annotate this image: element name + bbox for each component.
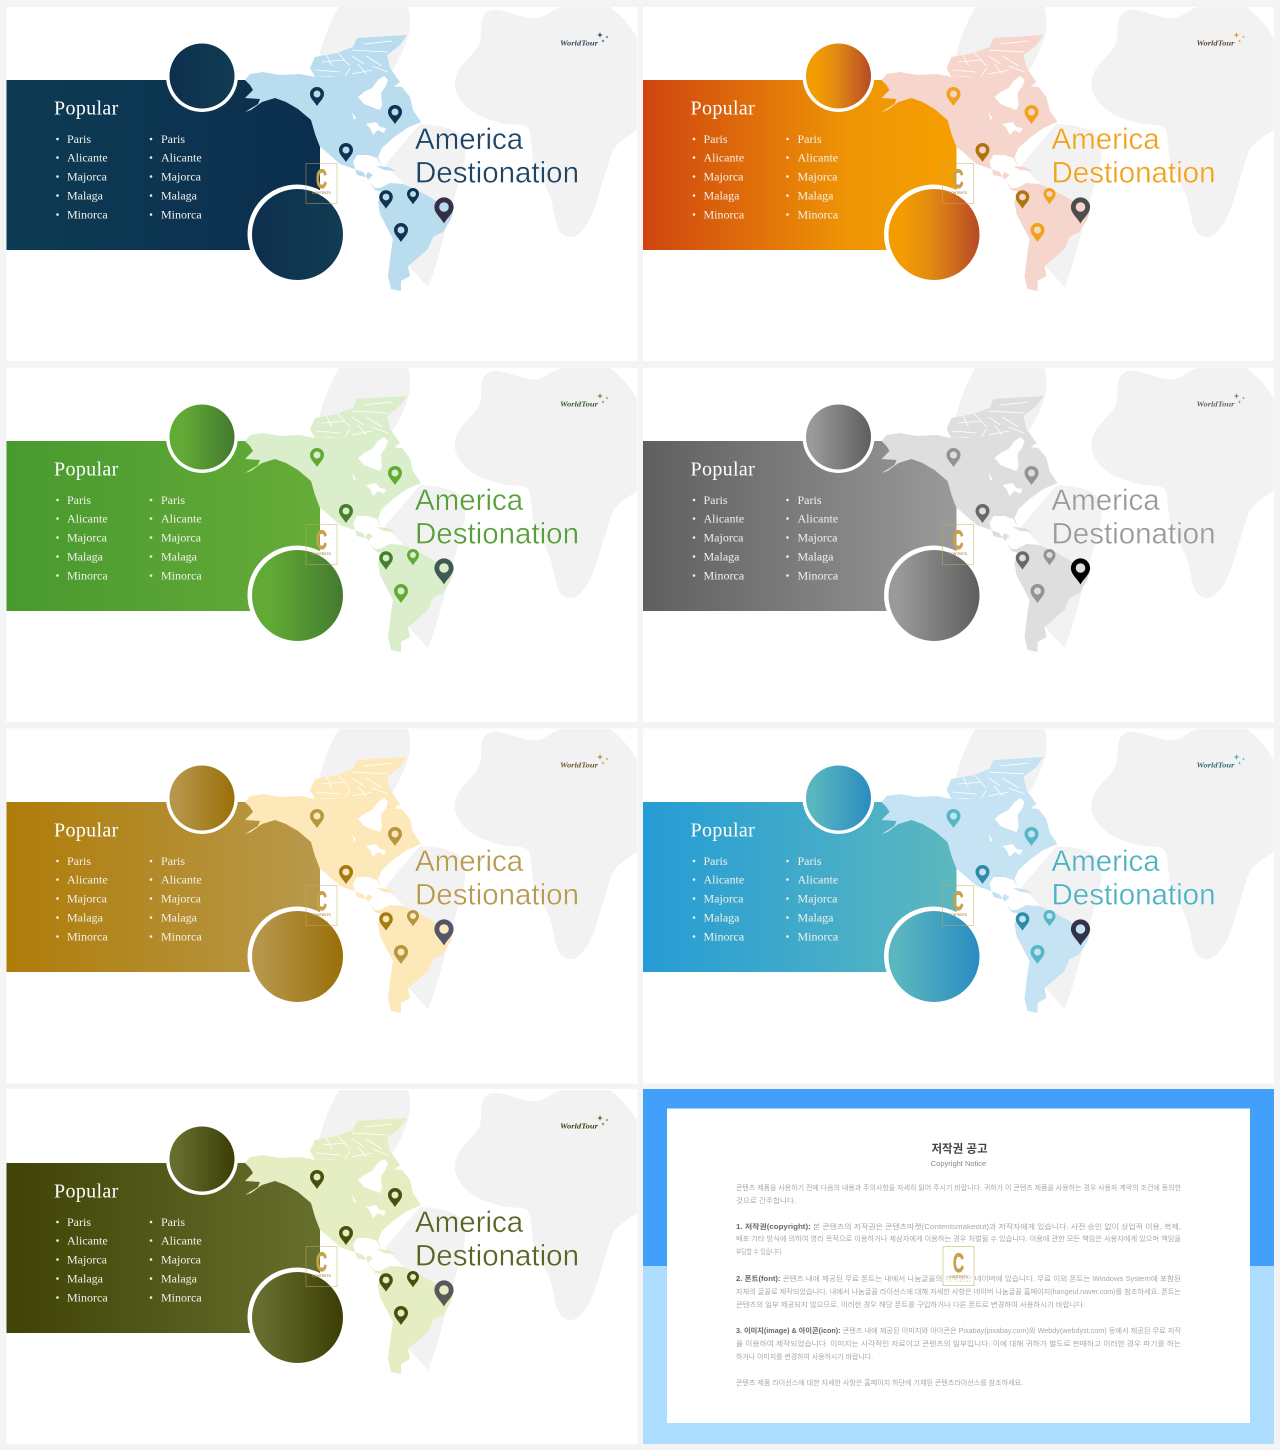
slide background (6, 1089, 638, 1444)
list column 1: Majorca (67, 170, 108, 184)
list column 2: Alicante (798, 872, 838, 886)
list column 1: Alicante (704, 512, 744, 526)
list column 1: Minorca (67, 208, 108, 222)
title: Destionation (415, 156, 579, 190)
bottom circle (248, 1268, 346, 1366)
title: America (1052, 845, 1160, 878)
logo (560, 393, 608, 408)
list column 2: Malaga (798, 910, 834, 924)
logo: WorldTour (560, 38, 598, 48)
section 3: image and icon: 3. 이미지(image) & 아이콘(icon): 콘텐츠 내에 제공된 이미지와 아이콘은 Pixabay(pixabay.com)와 Webdy(webdyst.com) 등에서 제공된 무료 저작 (736, 1326, 1182, 1335)
list column 2: Alicante (161, 512, 202, 526)
background world shapes (318, 1090, 637, 1370)
background world shapes (954, 368, 1274, 648)
logo (1196, 32, 1245, 48)
list column 2: Minorca (161, 568, 202, 582)
map pins (310, 809, 454, 964)
top circle (802, 401, 874, 473)
heading: Popular: Popular (54, 458, 119, 480)
list column 2: Alicante (161, 150, 202, 164)
panel: ochre slide (6, 728, 638, 1084)
panel: grey slide (643, 368, 1274, 722)
list column 2: Minorca (161, 930, 202, 944)
list column 2: Alicante (161, 1234, 202, 1248)
watermark: C (316, 886, 327, 916)
watermark: C (953, 1248, 964, 1278)
list column 2: Majorca (798, 170, 838, 184)
map pins (310, 448, 454, 603)
watermark: CONTENTS (949, 552, 968, 556)
list column 2: Paris (161, 854, 185, 868)
list column 1: Malaga (704, 188, 740, 202)
blue frame top (643, 1089, 1274, 1266)
heading: Popular: Popular (54, 1180, 119, 1202)
background world shapes (954, 7, 1274, 287)
list column 2: Malaga (161, 910, 198, 924)
map pins (946, 87, 1090, 242)
heading: Popular: Popular (690, 458, 755, 480)
logo: WorldTour (560, 400, 598, 408)
intro paragraph (736, 1183, 1182, 1205)
intro paragraph: 콘텐츠 제품을 사용하기 전에 다음의 내용과 주의사항을 자세히 읽어 주시기 바랍니다. 귀하가 이 콘텐츠 제품을 사용하는 경우 사용자 계약의 조건에 동의한 (736, 1183, 1182, 1192)
notice subtitle: Copyright Notice (931, 1159, 986, 1168)
top circle (166, 762, 238, 834)
section 2: font (736, 1274, 1182, 1309)
list column 1: Paris (67, 1215, 91, 1229)
slide background (643, 728, 1274, 1084)
section 1: copyright (736, 1222, 1182, 1256)
logo (1196, 393, 1245, 408)
list column 1: Paris (67, 493, 91, 507)
section 3: image and icon: 하거나 이미지를 변경하여 사용하시기 바랍니다. (736, 1352, 873, 1361)
colour panel (6, 80, 320, 250)
watermark (306, 164, 337, 204)
title: Destionation (1052, 518, 1216, 550)
blue frame bottom (643, 1266, 1274, 1444)
list column 1: Malaga (67, 550, 104, 564)
list column 2: Malaga (161, 188, 198, 202)
list column 2: Alicante (798, 150, 838, 164)
list column 2: Minorca (798, 208, 839, 222)
list column 1: Minorca (67, 1290, 108, 1304)
logo (560, 32, 608, 48)
slide background (6, 728, 638, 1084)
title: Destionation (415, 518, 579, 550)
panel: navy slide (6, 7, 638, 361)
list bullets (693, 860, 789, 938)
list column 1: Alicante (67, 512, 108, 526)
watermark: CONTENTS (949, 191, 968, 195)
logo: WorldTour (1196, 760, 1235, 770)
colour panel (643, 802, 956, 972)
list column 1: Alicante (67, 872, 108, 886)
panel: green slide (6, 368, 638, 722)
intro paragraph: 것으로 간주합니다. (736, 1196, 796, 1205)
list column 1: Malaga (704, 550, 740, 564)
list column 1: Paris (704, 854, 728, 868)
list column 2: Paris (798, 854, 822, 868)
watermark: CONTENTS (949, 913, 968, 917)
watermark (942, 886, 974, 926)
top circle (166, 1123, 238, 1195)
list column 2: Alicante (798, 512, 838, 526)
bottom circle (884, 546, 983, 644)
panel: orange slide (643, 7, 1274, 361)
background world shapes (954, 729, 1274, 1009)
heading: Popular: Popular (690, 98, 755, 120)
colour panel (6, 441, 320, 611)
title: Destionation (1052, 156, 1216, 190)
list bullets (56, 1221, 152, 1299)
section 3: image and icon (736, 1326, 1182, 1361)
list column 2: Paris (798, 493, 822, 507)
list column 1: Alicante (67, 1234, 108, 1248)
list column 2: Paris (161, 1215, 185, 1229)
watermark: C (952, 164, 964, 194)
list column 2: Malaga (161, 550, 198, 564)
title: America (415, 484, 524, 517)
list column 1: Paris (67, 132, 91, 146)
map pins (946, 448, 1090, 603)
list column 1: Malaga (67, 910, 104, 924)
list column 1: Minorca (704, 208, 745, 222)
logo: WorldTour (1196, 400, 1235, 408)
logo: WorldTour (1196, 38, 1235, 48)
list column 1: Alicante (704, 150, 744, 164)
watermark (943, 1246, 974, 1286)
watermark: CONTENTS (949, 1275, 969, 1279)
section 1: copyright: 부담할 수 있습니다. (736, 1247, 783, 1256)
slide background (6, 368, 638, 722)
list column 1: Malaga (67, 1272, 104, 1286)
map of the Americas (245, 1118, 453, 1374)
colour panel (643, 80, 956, 250)
watermark (306, 886, 337, 926)
map of the Americas (245, 35, 453, 291)
watermark (306, 524, 337, 564)
title: Destionation (1052, 878, 1216, 912)
bottom circle (248, 546, 346, 644)
heading: Popular: Popular (54, 98, 119, 120)
list column 1: Paris (704, 493, 728, 507)
top circle (802, 762, 874, 834)
heading: Popular: Popular (690, 820, 755, 842)
list column 2: Majorca (161, 892, 202, 906)
list bullets (56, 138, 152, 216)
section 3: image and icon: 물 이용하여 제작되었습니다. 이미지는 시각적인 자료이고 콘텐츠의 일부입니다. 이에 대해 귀하가 별도로 판매하고 이러한 경우 파기를 하는 (736, 1339, 1182, 1348)
watermark (942, 524, 974, 564)
list column 2: Majorca (798, 892, 838, 906)
logo: WorldTour (560, 1122, 598, 1130)
bottom circle (884, 184, 983, 284)
watermark: CONTENTS (312, 913, 332, 917)
list column 1: Paris (67, 854, 91, 868)
section 2: font: 자체의 글꼴로 제작되었습니다. 내에서 나눔글꼴 라이선스에 대해 자세한 사항은 네이버 나눔글꼴 홈페이지(hangeul.naver.com)를 참조하세요. 폰트는 (736, 1287, 1182, 1296)
list column 1: Minorca (67, 930, 108, 944)
logo (560, 1115, 608, 1130)
watermark: C (316, 525, 327, 555)
title: Destionation (415, 1240, 579, 1272)
colour panel (6, 1163, 320, 1333)
map pins (946, 809, 1090, 964)
logo (1196, 754, 1245, 770)
white card (667, 1108, 1250, 1423)
list column 2: Majorca (161, 170, 202, 184)
watermark: C (316, 1247, 327, 1277)
colour panel (6, 802, 320, 972)
top circle (802, 40, 874, 112)
title: America (415, 845, 524, 878)
panel: blue slide (643, 728, 1274, 1084)
map pins (310, 1170, 454, 1325)
section 1: copyright: 1. 저작권(copyright): 본 콘텐츠의 저작권은 콘텐츠마켓(Contentsmakeout)과 저작자에게 있습니다. 사전 승인 없이 상업적 이용, 복제, (736, 1222, 1181, 1231)
list bullets (693, 138, 789, 216)
list column 2: Minorca (798, 930, 839, 944)
list bullets (56, 499, 152, 577)
bottom circle (248, 184, 346, 284)
list column 1: Paris (704, 132, 728, 146)
title: America (1052, 484, 1160, 517)
section 2: font: 2. 폰트(font): 콘텐츠 내에 제공된 무료 폰트는 내에서 나눔글꼴의 저작권은 네이버에 있습니다. 무료 이외 폰트는 Windows System에 포함된 (736, 1274, 1181, 1283)
list column 1: Minorca (67, 568, 108, 582)
heading: Popular: Popular (54, 820, 119, 842)
top circle (166, 401, 238, 473)
panel: copyright notice (643, 1089, 1274, 1444)
list column 1: Malaga (67, 188, 104, 202)
list bullets (56, 860, 152, 938)
list column 1: Alicante (704, 872, 744, 886)
map of the Americas (245, 396, 453, 652)
watermark (306, 1246, 337, 1286)
section 1: copyright: 배포 기타 방식에 의하여 영리 목적으로 이용하거나 제삼자에게 이용하는 경우 처벌될 수 있습니다. 이용에 관한 모든 책임은 사용자에게 있으며 책임을 (736, 1234, 1182, 1243)
background world shapes (318, 7, 637, 287)
top circle (166, 40, 238, 112)
notice title: 저작권 공고 (931, 1142, 988, 1156)
list column 1: Majorca (704, 892, 744, 906)
list column 2: Minorca (161, 208, 202, 222)
map of the Americas (882, 396, 1090, 652)
watermark: C (316, 164, 327, 194)
panel: olive slide (6, 1089, 638, 1444)
background world shapes (318, 368, 637, 648)
watermark (942, 164, 974, 204)
title: America (415, 1206, 524, 1239)
bottom circle (248, 906, 346, 1006)
colour panel (643, 441, 956, 611)
watermark: C (952, 886, 964, 916)
map pins (310, 87, 454, 242)
list column 2: Malaga (798, 188, 834, 202)
slide background (6, 7, 638, 361)
watermark: C (952, 525, 964, 555)
list column 2: Paris (798, 132, 822, 146)
map of the Americas (882, 757, 1090, 1013)
list column 1: Majorca (67, 1252, 108, 1266)
list column 2: Majorca (161, 1252, 202, 1266)
list column 2: Minorca (798, 568, 839, 582)
bottom circle (884, 906, 983, 1006)
watermark: CONTENTS (312, 1274, 332, 1278)
list column 1: Majorca (67, 530, 108, 544)
list bullets (693, 499, 789, 577)
list column 2: Malaga (161, 1272, 198, 1286)
list column 2: Paris (161, 493, 185, 507)
list column 1: Malaga (704, 910, 740, 924)
list column 2: Alicante (161, 872, 202, 886)
background world shapes (318, 729, 637, 1009)
title: America (1052, 123, 1160, 156)
title: Destionation (415, 878, 579, 912)
map of the Americas (882, 35, 1090, 291)
list column 1: Alicante (67, 150, 108, 164)
closing line: 콘텐츠 제품 라이선스에 대한 자세한 사항은 홈페이지 하단에 기재된 콘텐츠라이선스를 참조하세요. (736, 1378, 1023, 1387)
logo (560, 754, 608, 770)
list column 1: Majorca (704, 530, 744, 544)
list column 2: Majorca (161, 530, 202, 544)
list column 2: Majorca (798, 530, 838, 544)
list column 2: Minorca (161, 1290, 202, 1304)
list column 1: Majorca (67, 892, 108, 906)
list column 2: Malaga (798, 550, 834, 564)
list column 2: Paris (161, 132, 185, 146)
section 2: font: 콘텐츠의 일부 제공되지 않으므로, 이러한 경우 해당 폰트를 구입하거나 다른 폰트로 변경하여 사용하시기 바랍니다. (736, 1300, 1085, 1309)
watermark: CONTENTS (312, 191, 332, 195)
watermark: CONTENTS (312, 552, 332, 556)
slide background (643, 7, 1274, 361)
title: America (415, 123, 524, 156)
slide background (643, 368, 1274, 722)
list column 1: Majorca (704, 170, 744, 184)
list column 1: Minorca (704, 568, 745, 582)
map of the Americas (245, 757, 453, 1013)
logo: WorldTour (560, 760, 598, 770)
list column 1: Minorca (704, 930, 745, 944)
